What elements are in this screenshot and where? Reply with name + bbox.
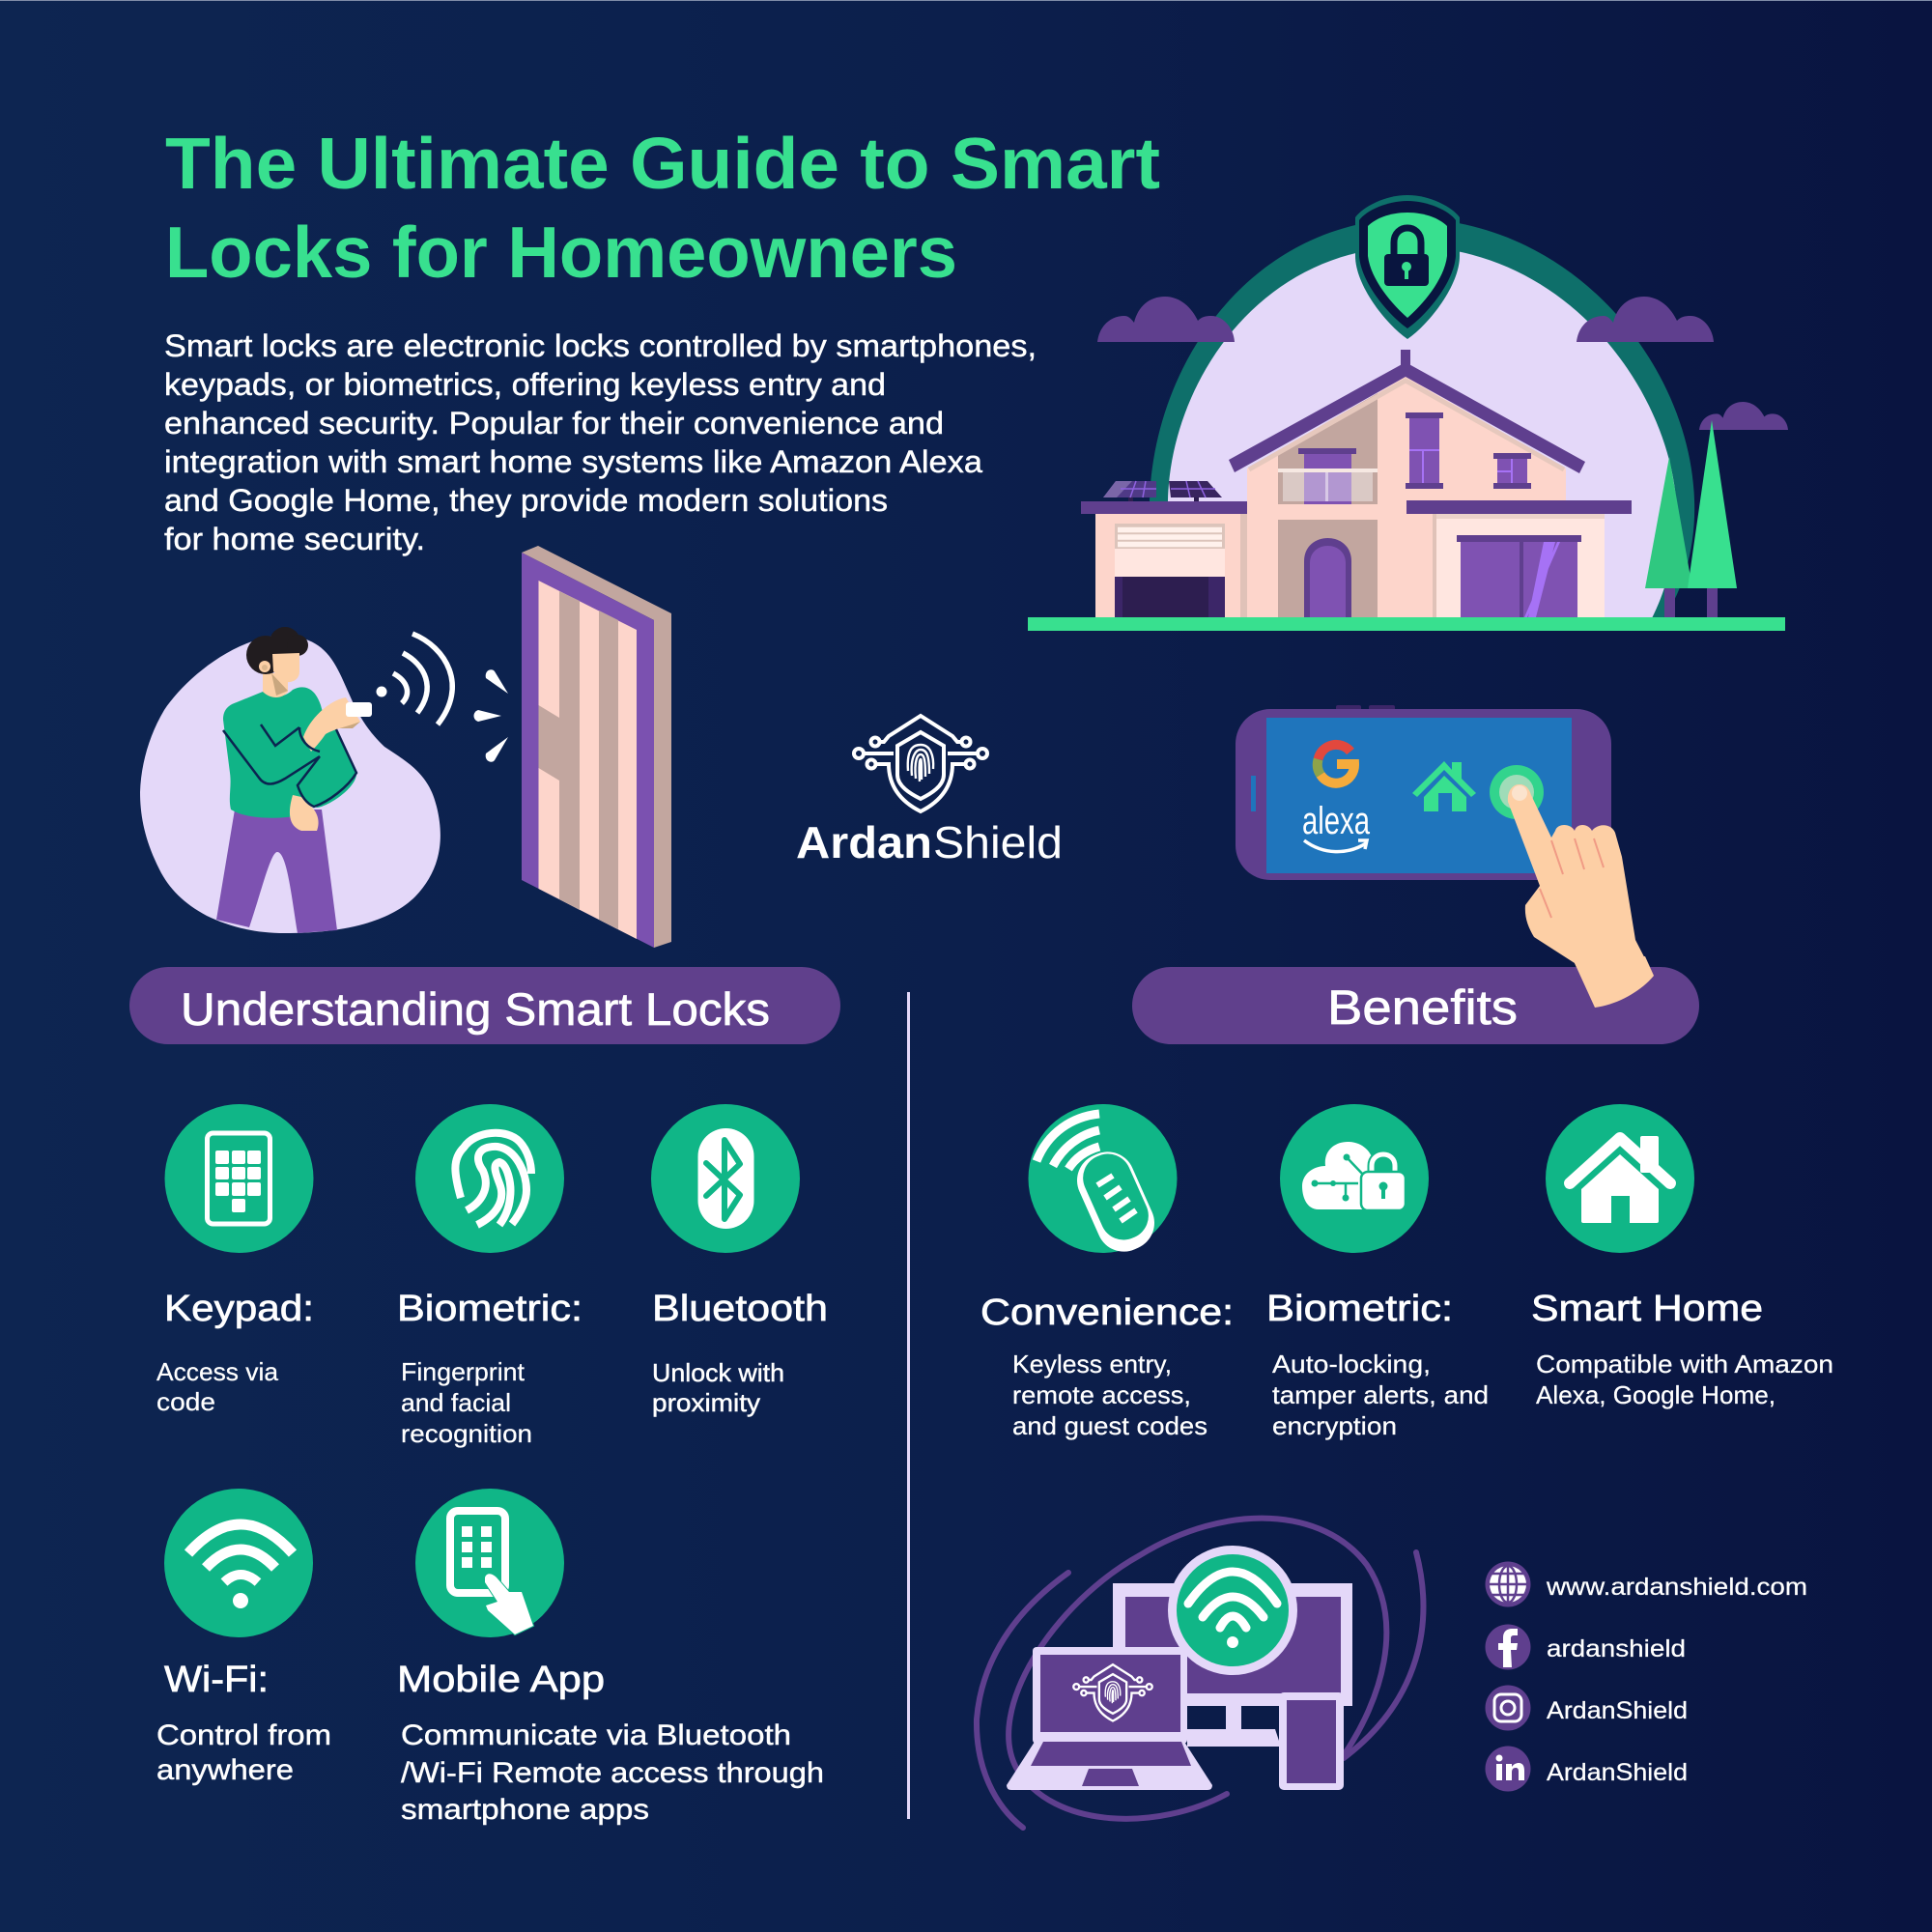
item: biometric: Fingerprint xyxy=(401,1357,526,1386)
item: biometric: recognition xyxy=(401,1419,532,1448)
key fob xyxy=(346,702,372,717)
alexa logo: alexa xyxy=(1302,800,1371,842)
icon: linkedin xyxy=(1495,1754,1524,1780)
item: wi-fi: Control from xyxy=(156,1719,331,1751)
intro paragraph: integration with smart home systems like Amazon Alexa xyxy=(164,444,982,479)
item: smart home: Compatible with Amazon xyxy=(1536,1350,1833,1378)
item: keypad xyxy=(156,1104,314,1416)
item: bluetooth: proximity xyxy=(652,1388,760,1417)
hand xyxy=(1508,784,1654,1008)
item: bluetooth: Unlock with xyxy=(652,1358,784,1387)
item: biometric benefits: Auto-locking, xyxy=(1272,1350,1431,1378)
contact: website xyxy=(1486,1561,1807,1607)
icon: phone and finger xyxy=(450,1511,533,1634)
icon: facebook xyxy=(1498,1629,1518,1667)
forearm xyxy=(303,697,360,752)
item: keypad: code xyxy=(156,1387,215,1416)
icon: remote with signal xyxy=(1037,1114,1163,1261)
item: biometric xyxy=(397,1104,582,1448)
icon: wifi xyxy=(188,1524,293,1608)
laptop xyxy=(1007,1647,1212,1790)
arm sleeve xyxy=(298,729,356,807)
contact: facebook xyxy=(1486,1625,1686,1669)
benefits label: Benefits xyxy=(1327,980,1518,1035)
title: The Ultimate Guide to Smart xyxy=(165,123,1160,204)
contact: instagram: ArdanShield xyxy=(1547,1697,1688,1724)
person with key fob xyxy=(140,627,508,933)
title: Locks for Homeowners xyxy=(165,212,957,293)
divider xyxy=(907,992,910,1819)
item: smart home: Smart Home xyxy=(1531,1289,1763,1329)
icon: mini logo xyxy=(1073,1664,1152,1721)
contact: website: www.ardanshield.com xyxy=(1546,1574,1807,1601)
phone with hand xyxy=(1236,705,1654,1008)
item: convenience: remote access, xyxy=(1012,1380,1191,1409)
benefits hand overlap xyxy=(1575,956,1654,1008)
icon: bluetooth xyxy=(697,1128,753,1229)
brand name xyxy=(796,817,1063,867)
item: keypad: Access via xyxy=(156,1357,279,1386)
item: mobile app: Communicate via Bluetooth xyxy=(401,1719,791,1751)
head xyxy=(246,627,308,697)
item: biometric: Biometric: xyxy=(397,1289,582,1329)
wifi badge xyxy=(1168,1546,1297,1675)
intro paragraph: for home security. xyxy=(164,522,425,556)
orbit swooshes xyxy=(977,1519,1423,1828)
arch backdrop xyxy=(1150,218,1694,618)
item: convenience: Keyless entry, xyxy=(1012,1350,1172,1378)
item: wi-fi: Wi-Fi: xyxy=(164,1660,269,1700)
lower hand xyxy=(290,795,319,831)
building xyxy=(1081,350,1632,617)
item: biometric benefits: Biometric: xyxy=(1266,1289,1453,1329)
door xyxy=(522,546,671,948)
icon: fingerprint xyxy=(455,1133,531,1225)
shirt outlines xyxy=(223,724,356,807)
intro paragraph: keypads, or biometrics, offering keyless entry and xyxy=(164,367,886,402)
heading pill: understanding xyxy=(129,967,840,1044)
signal waves xyxy=(377,634,452,724)
brand name: Shield xyxy=(933,817,1063,867)
intro paragraph: Smart locks are electronic locks controlled by smartphones, xyxy=(164,328,1037,363)
intro paragraph xyxy=(164,328,1037,556)
item: bluetooth xyxy=(651,1104,828,1417)
icon: shield fingerprint xyxy=(854,716,987,811)
icon: keypad xyxy=(207,1133,270,1224)
torso xyxy=(223,687,356,818)
item: biometric benefits xyxy=(1266,1104,1489,1440)
contact: instagram xyxy=(1486,1685,1688,1731)
item: biometric benefits: tamper alerts, and xyxy=(1272,1380,1489,1409)
clouds xyxy=(1097,297,1788,430)
item: smart home: Alexa, Google Home, xyxy=(1536,1380,1776,1409)
icon: house xyxy=(1570,1136,1670,1223)
icon: security shield xyxy=(1355,195,1460,339)
signal spikes xyxy=(473,669,508,762)
title xyxy=(165,123,1160,293)
item: convenience xyxy=(980,1104,1234,1440)
heading pill: understanding: Understanding Smart Locks xyxy=(181,983,770,1035)
legs xyxy=(216,810,337,933)
solar panels xyxy=(1103,481,1222,502)
ground xyxy=(1028,617,1785,631)
tablet xyxy=(1279,1692,1344,1790)
item: mobile app xyxy=(397,1489,824,1826)
icon: instagram xyxy=(1494,1694,1521,1721)
lavender blob xyxy=(140,635,440,933)
heading pill: benefits xyxy=(1132,967,1699,1044)
item: convenience: Convenience: xyxy=(980,1293,1234,1333)
intro paragraph: and Google Home, they provide modern solutions xyxy=(164,483,888,518)
item: biometric: and facial xyxy=(401,1388,511,1417)
house illustration xyxy=(1028,195,1788,631)
trees xyxy=(1645,420,1737,617)
item: biometric benefits: encryption xyxy=(1272,1411,1397,1440)
contact: facebook: ardanshield xyxy=(1547,1635,1686,1662)
icon: Google G xyxy=(1318,745,1354,783)
item: mobile app: smartphone apps xyxy=(401,1794,649,1826)
item: wi-fi: anywhere xyxy=(156,1754,294,1786)
phone body xyxy=(1236,709,1611,880)
item: smart home xyxy=(1531,1104,1833,1409)
monitor xyxy=(1113,1583,1352,1747)
item: keypad: Keypad: xyxy=(164,1289,314,1329)
brand name: Ardan xyxy=(796,817,932,867)
contact: linkedin: ArdanShield xyxy=(1547,1759,1688,1786)
contact: linkedin xyxy=(1486,1747,1688,1791)
item: mobile app: /Wi-Fi Remote access through xyxy=(401,1757,824,1789)
item: mobile app: Mobile App xyxy=(397,1660,605,1700)
touch button xyxy=(1490,765,1544,819)
alexa logo xyxy=(1302,800,1371,852)
icon: globe xyxy=(1490,1566,1526,1603)
item: wi-fi xyxy=(156,1489,331,1786)
devices illustration xyxy=(977,1519,1423,1828)
intro paragraph: enhanced security. Popular for their convenience and xyxy=(164,406,944,440)
icon: home xyxy=(1412,761,1476,811)
item: convenience: and guest codes xyxy=(1012,1411,1208,1440)
logo: ArdanShield xyxy=(796,716,1063,867)
icon: cloud and padlock xyxy=(1302,1142,1406,1210)
item: bluetooth: Bluetooth xyxy=(652,1289,828,1329)
